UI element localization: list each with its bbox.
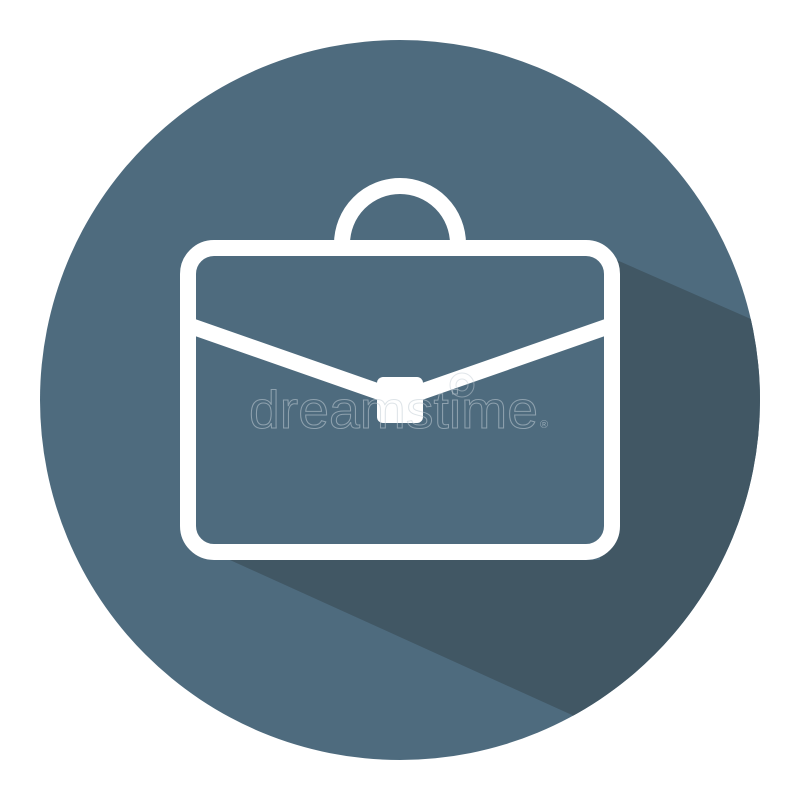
briefcase body [188,248,612,552]
icon: briefcase [188,186,612,552]
briefcase flap [195,319,605,400]
watermark: dreamstime [249,381,538,440]
briefcase handle [342,186,458,244]
watermark swirl [450,373,474,397]
registered mark: ® [540,419,548,431]
long shadow [230,260,760,716]
briefcase clasp [377,377,423,423]
